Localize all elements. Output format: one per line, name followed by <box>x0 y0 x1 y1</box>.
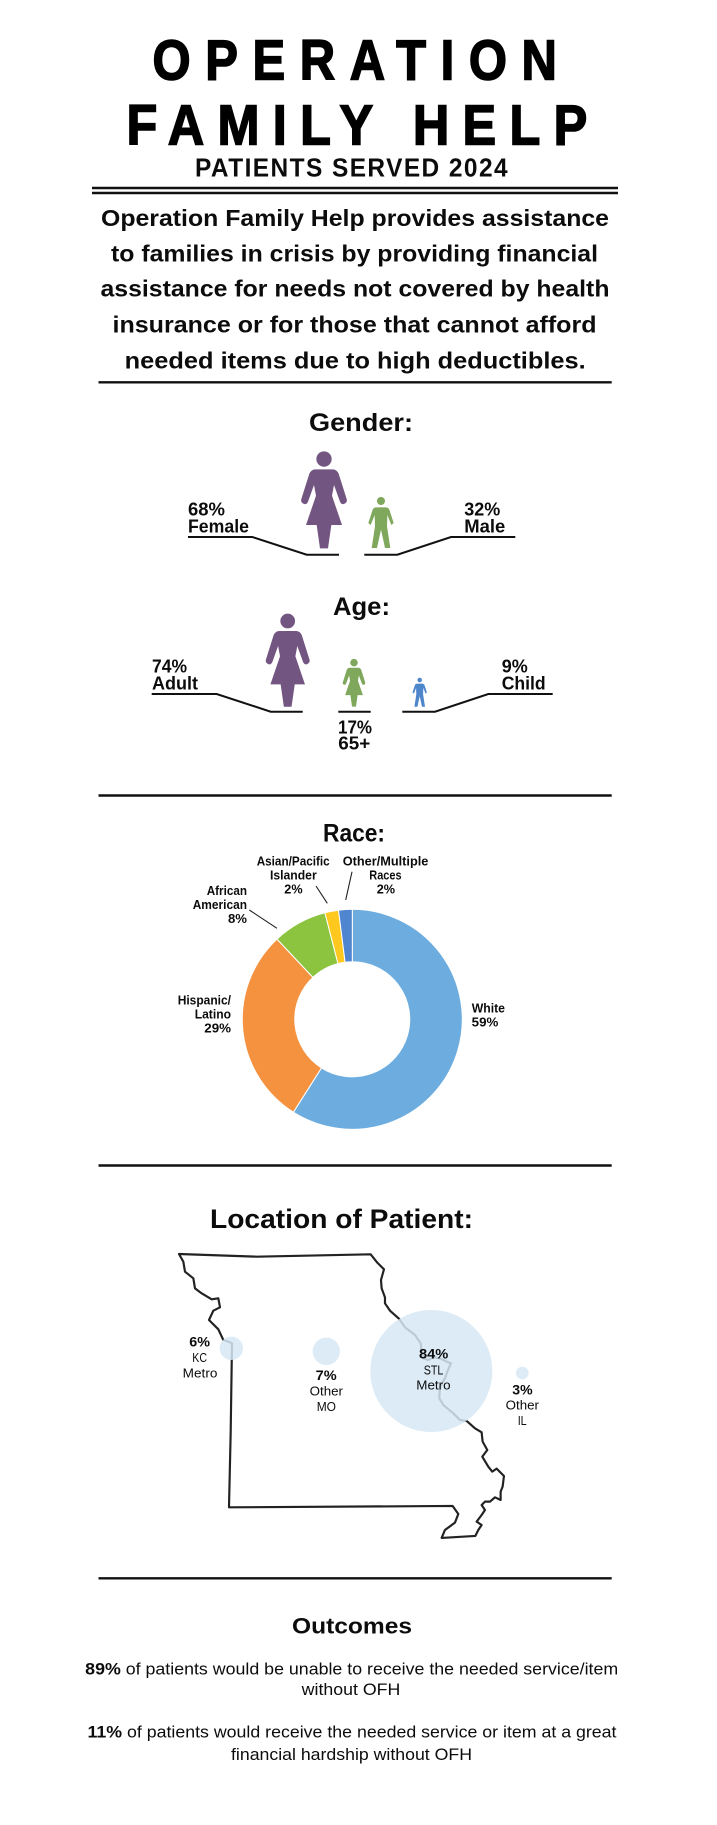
label: african american: African <box>207 883 247 898</box>
intro text block: to families in crisis by providing financial <box>111 240 598 266</box>
icon: adult figure <box>266 614 310 707</box>
label: hispanic/latino: Hispanic/ <box>178 993 231 1008</box>
segment: asian 2% <box>325 910 345 964</box>
label: stl metro: Metro <box>416 1378 451 1393</box>
label: child share: Child <box>502 673 546 693</box>
label: female share <box>188 500 249 537</box>
title <box>126 28 600 157</box>
segment: other 2% <box>338 909 352 962</box>
leader lines <box>249 872 352 928</box>
label: asian/pacific islander: 2% <box>284 881 303 896</box>
label: african american: American <box>193 897 247 912</box>
heading: gender: Gender: <box>309 409 413 437</box>
label: other/multiple races: Races <box>369 867 402 882</box>
outcome: 89%: without OFH <box>301 1681 400 1699</box>
bubbles <box>220 1310 529 1432</box>
label: other/multiple races: 2% <box>377 881 395 896</box>
heading: age: Age: <box>333 593 390 621</box>
label: kc metro: Metro <box>183 1365 217 1380</box>
label: adult share <box>152 657 198 693</box>
heading: outcomes: Outcomes <box>292 1614 412 1638</box>
heading: race: Race: <box>323 820 385 848</box>
outcome: 89%: 89% of patients would be unable to receive the needed service/item <box>85 1660 618 1678</box>
label: stl metro: STL <box>424 1362 443 1377</box>
panel: gender <box>188 409 515 555</box>
label: adult share: Adult <box>152 673 198 693</box>
label: other/multiple races: Other/Multiple <box>343 853 428 868</box>
title: FAMILY HELP <box>126 93 600 157</box>
subtitle: PATIENTS SERVED 2024 <box>195 155 509 183</box>
icon: male figure <box>368 497 394 548</box>
leader: child <box>402 694 553 712</box>
intro text block: Operation Family Help provides assistance <box>101 205 609 231</box>
label: hispanic/latino <box>178 993 231 1036</box>
segment: white 59% <box>293 909 462 1129</box>
intro text block: assistance for needs not covered by health <box>100 276 610 302</box>
label: male share: 32% <box>464 500 500 520</box>
label: adult share: 74% <box>152 657 187 677</box>
label: 65+ share <box>338 717 372 754</box>
label: 65+ share: 65+ <box>338 734 370 754</box>
intro text block <box>100 205 610 373</box>
heading: location: Location of Patient: <box>210 1204 473 1234</box>
icon: 65+ figure <box>343 659 365 707</box>
label: male share: Male <box>464 517 505 537</box>
donut chart <box>242 909 462 1129</box>
title: OPERATION <box>152 28 572 92</box>
icon: child figure <box>412 678 427 707</box>
label: 65+ share: 17% <box>338 717 372 737</box>
icon: female figure <box>301 451 347 548</box>
label: kc metro <box>183 1333 217 1380</box>
intro text block: needed items due to high deductibles. <box>125 347 586 373</box>
leader: adult <box>152 694 303 712</box>
label: kc metro: 6% <box>189 1333 211 1349</box>
label: other mo <box>310 1367 344 1414</box>
leader: male <box>364 537 515 555</box>
panel: location <box>179 1204 540 1538</box>
label: other mo: 7% <box>316 1367 337 1383</box>
label: white: White <box>472 1001 505 1016</box>
label: other il: 3% <box>512 1381 533 1397</box>
label: asian/pacific islander: Islander <box>270 867 317 882</box>
panel: outcomes <box>85 1614 618 1764</box>
label: female share: 68% <box>188 500 225 520</box>
label: asian/pacific islander: Asian/Pacific <box>257 853 330 868</box>
label: stl metro: 84% <box>419 1345 449 1361</box>
label: white: 59% <box>472 1015 499 1030</box>
label: other il: Other <box>506 1398 540 1413</box>
outcome: 89% <box>85 1660 618 1699</box>
label: other/multiple races <box>343 853 428 896</box>
leader: female <box>188 537 339 555</box>
segment: hispanic 29% <box>242 939 322 1112</box>
outcome: 11% <box>88 1724 617 1764</box>
panel: race <box>178 820 505 1129</box>
label: asian/pacific islander <box>257 853 330 896</box>
outcome: 11%: financial hardship without OFH <box>231 1746 472 1764</box>
label: female share: Female <box>188 517 249 537</box>
map: missouri outline <box>179 1254 504 1538</box>
label: other il <box>506 1381 540 1428</box>
label: african american: 8% <box>228 911 247 926</box>
label: male share <box>464 500 505 537</box>
label: child share <box>502 657 546 693</box>
label: hispanic/latino: 29% <box>204 1021 231 1036</box>
label: stl metro <box>416 1345 451 1393</box>
label: other mo: MO <box>317 1399 336 1414</box>
label: other il: IL <box>518 1413 527 1428</box>
label: african american <box>193 883 247 926</box>
label: other mo: Other <box>310 1383 344 1398</box>
intro text block: insurance or for those that cannot afford <box>112 312 596 338</box>
label: hispanic/latino: Latino <box>195 1007 231 1022</box>
leader: 65+ <box>338 711 371 713</box>
label: kc metro: KC <box>192 1350 207 1365</box>
segment: african american 8% <box>277 913 338 977</box>
label: child share: 9% <box>502 657 528 677</box>
panel: age <box>152 593 553 754</box>
outcome: 11%: 11% of patients would receive the needed service or item at a great <box>88 1724 617 1742</box>
label: white <box>472 1001 505 1030</box>
